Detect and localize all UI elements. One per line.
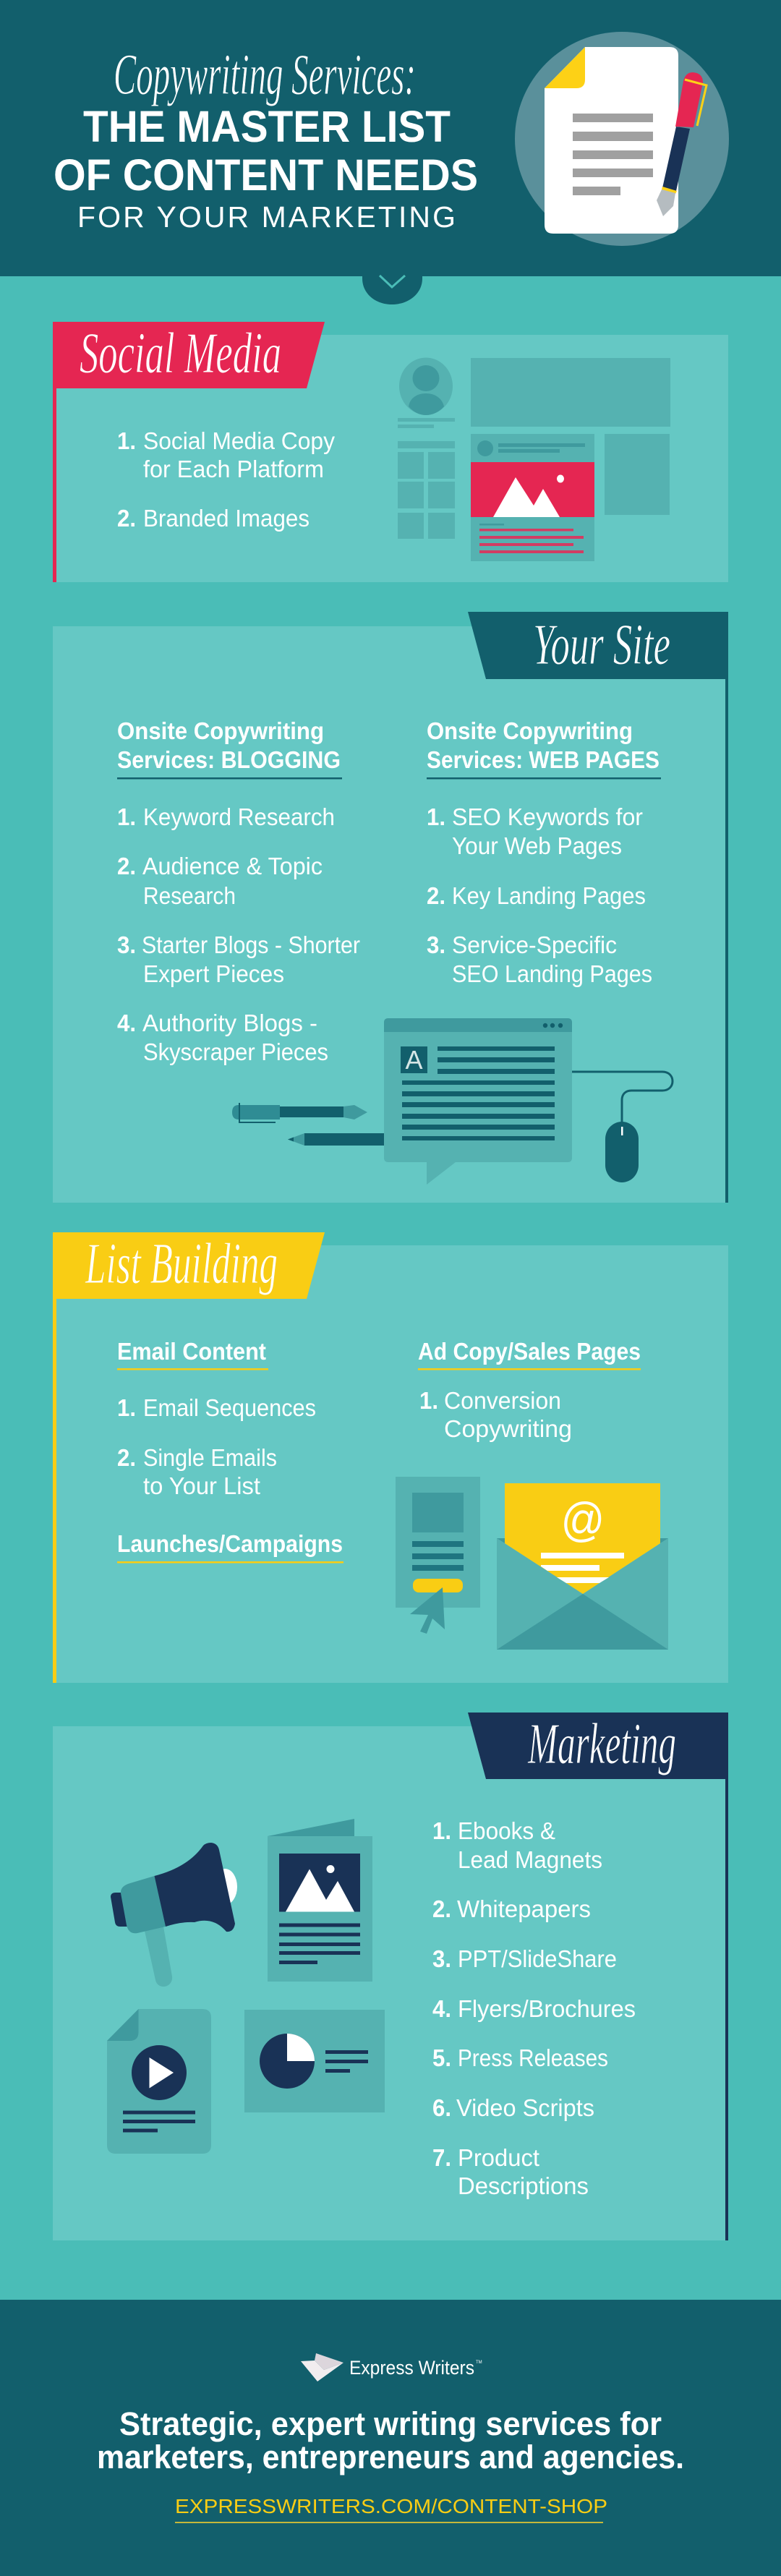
tagline: Strategic, expert writing services for	[119, 2405, 662, 2442]
column: web pages: Onsite Copywriting	[427, 717, 633, 744]
list: social media: 1.	[117, 427, 136, 454]
column: blogging: Authority Blogs -	[142, 1010, 317, 1036]
icon: megaphone	[111, 1843, 237, 1987]
banner: your site: Your Site	[533, 613, 670, 677]
icon: landing page with cursor	[396, 1477, 480, 1634]
column: blogging: Services: BLOGGING	[117, 746, 341, 773]
column: blogging: Keyword Research	[143, 803, 335, 830]
icon: email envelope: @	[561, 1493, 605, 1547]
column: web pages: Service-Specific	[452, 931, 617, 958]
banner: list building	[53, 1232, 325, 1299]
list: social media	[117, 427, 335, 532]
column: blogging: 4.	[117, 1010, 136, 1036]
banner: social media: Social Media	[80, 322, 281, 385]
panel: social media	[53, 322, 728, 582]
column: blogging: Expert Pieces	[143, 960, 284, 987]
list: marketing: 7.	[432, 2144, 451, 2171]
list: marketing: 2.	[432, 1895, 451, 1922]
icon: pencil	[288, 1133, 384, 1146]
list: marketing: 5.	[432, 2044, 451, 2071]
column: email content: Single Emails	[143, 1444, 277, 1471]
column: web pages: Key Landing Pages	[452, 882, 646, 909]
title: FOR YOUR MARKETING	[77, 200, 456, 234]
column: ad copy: Ad Copy/Sales Pages	[418, 1338, 641, 1365]
icon: email envelope	[497, 1483, 668, 1650]
column: web pages: SEO Keywords for	[452, 803, 643, 830]
column: email content: Email Sequences	[143, 1394, 316, 1421]
column: blogging: 2.	[117, 853, 136, 879]
list: social media: Social Media Copy	[143, 427, 335, 454]
logo: express writers: TM	[476, 2360, 482, 2365]
column: web pages: SEO Landing Pages	[452, 960, 652, 987]
panel: your site	[53, 612, 728, 1203]
column: email content: to Your List	[143, 1472, 260, 1499]
column: web pages: Services: WEB PAGES	[427, 746, 660, 773]
column: ad copy: Conversion	[444, 1387, 561, 1414]
list: marketing: 4.	[432, 1995, 451, 2022]
illustration: social profile	[398, 357, 670, 561]
icon: pie chart card	[244, 2010, 385, 2112]
panel: marketing	[53, 1713, 728, 2240]
tagline	[97, 2405, 684, 2475]
column: email content: 2.	[117, 1444, 136, 1471]
list: marketing: 6.	[432, 2094, 451, 2121]
icon: brochure	[268, 1819, 372, 1982]
column: ad copy: Copywriting	[444, 1415, 572, 1442]
column: blogging: Audience & Topic	[142, 853, 323, 879]
column: web pages: Your Web Pages	[452, 832, 622, 859]
column: blogging: Skyscraper Pieces	[143, 1038, 328, 1065]
column: blogging: 1.	[117, 803, 136, 830]
list: marketing: Descriptions	[458, 2172, 589, 2199]
list: marketing: Press Releases	[458, 2044, 608, 2071]
column: email content: 1.	[117, 1394, 136, 1421]
list: marketing: 1.	[432, 1817, 451, 1844]
column: blogging: Starter Blogs - Shorter	[142, 931, 360, 958]
list: marketing: Lead Magnets	[458, 1846, 602, 1873]
header band	[0, 0, 781, 276]
list: marketing: Video Scripts	[456, 2094, 594, 2121]
column: ad copy: 1.	[419, 1387, 438, 1414]
panel: list building	[53, 1232, 728, 1683]
chevron tab	[362, 276, 422, 304]
title: Copywriting Services:	[114, 43, 416, 107]
link: website url: EXPRESSWRITERS.COM/CONTENT-SHOP	[175, 2495, 607, 2517]
column: blogging: Research	[143, 882, 236, 909]
list: marketing	[432, 1817, 636, 2199]
banner: your site	[468, 612, 728, 679]
list: marketing: Ebooks &	[458, 1817, 555, 1844]
logo: express writers	[301, 2353, 482, 2381]
list: marketing: 3.	[432, 1945, 451, 1972]
title: THE MASTER LIST	[83, 102, 451, 151]
banner: list building: List Building	[85, 1232, 278, 1296]
tagline: marketers, entrepreneurs and agencies.	[97, 2439, 684, 2475]
list: social media: 2.	[117, 505, 136, 532]
column: blogging: 3.	[117, 931, 136, 958]
banner: marketing	[468, 1713, 728, 1779]
column: web pages: 3.	[427, 931, 445, 958]
icon: document and pen	[515, 32, 729, 246]
column: web pages: 1.	[427, 803, 445, 830]
list: marketing: Product	[458, 2144, 539, 2171]
icon: article window: A	[405, 1045, 423, 1075]
column: ad copy	[418, 1338, 641, 1442]
column: email content: Email Content	[117, 1338, 266, 1365]
list: marketing: Whitepapers	[457, 1895, 591, 1922]
logo: express writers: Express Writers	[349, 2357, 474, 2379]
column: blogging	[117, 717, 360, 1065]
banner: marketing: Marketing	[527, 1713, 676, 1776]
list: social media: Branded Images	[143, 505, 310, 532]
icon: article window	[384, 1018, 572, 1185]
icon: video document	[107, 2009, 211, 2154]
title	[54, 43, 478, 234]
list: marketing: PPT/SlideShare	[458, 1945, 617, 1972]
column: web pages	[427, 717, 661, 987]
title: OF CONTENT NEEDS	[54, 150, 478, 200]
column: blogging: Onsite Copywriting	[117, 717, 324, 744]
column: email content: Launches/Campaigns	[117, 1530, 343, 1557]
list: marketing: Flyers/Brochures	[458, 1995, 636, 2022]
footer	[0, 2300, 781, 2576]
list: social media: for Each Platform	[143, 456, 324, 482]
icon: mouse	[572, 1072, 673, 1182]
column: web pages: 2.	[427, 882, 445, 909]
icon: fountain pen	[232, 1103, 367, 1122]
column: email content	[117, 1338, 343, 1564]
